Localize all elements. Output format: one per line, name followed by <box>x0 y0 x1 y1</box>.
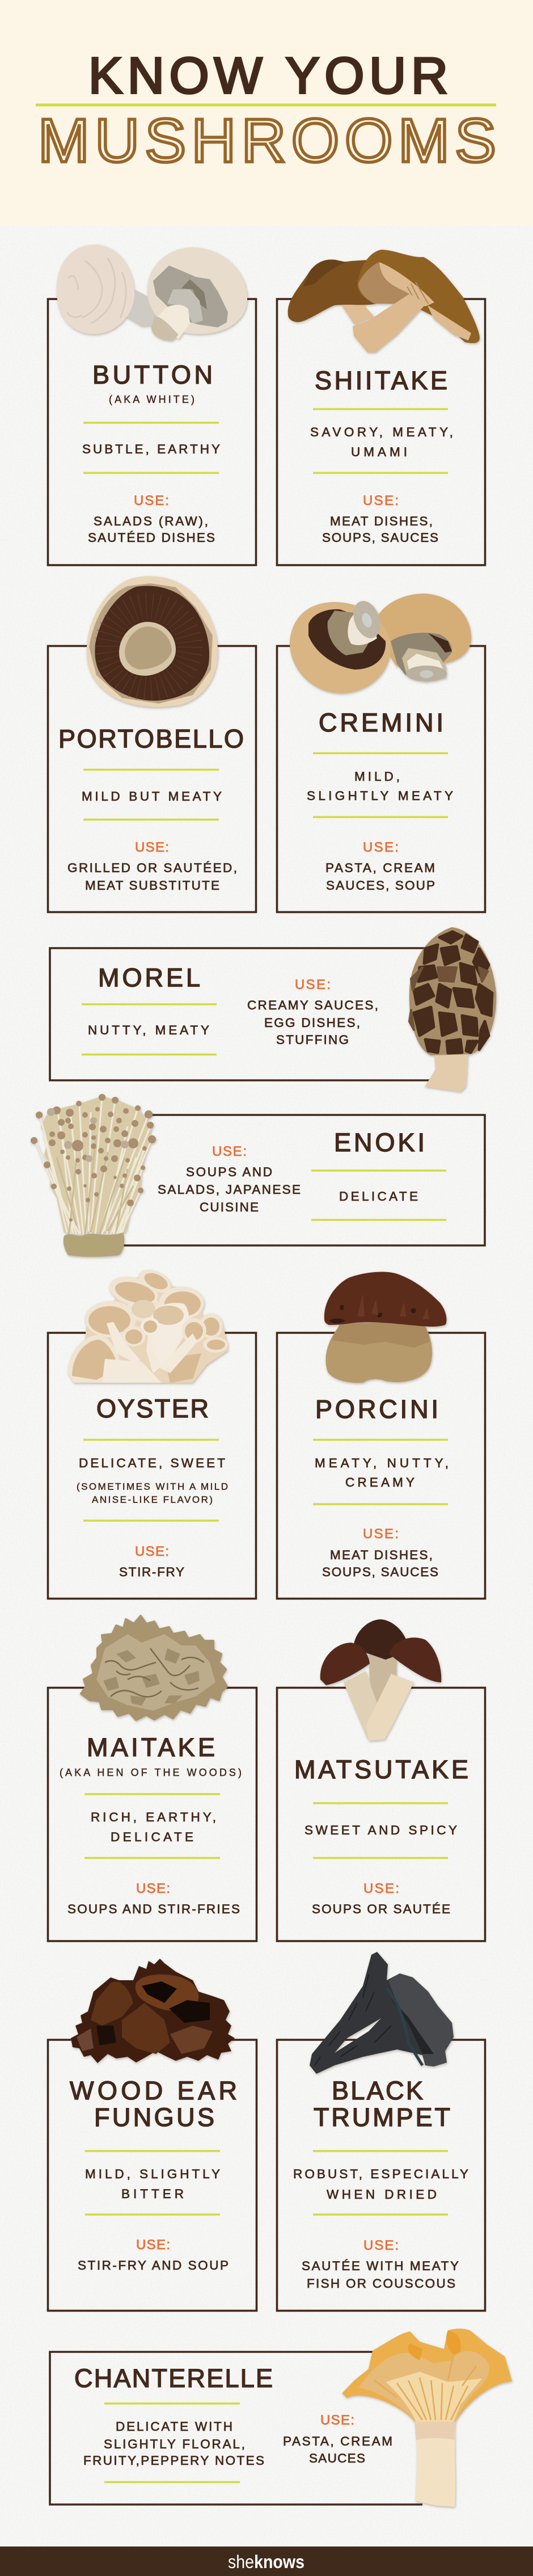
use label: USE: <box>363 2238 399 2253</box>
heading <box>70 2076 237 2132</box>
flavor text <box>91 1810 216 1844</box>
flavor text: NUTTY, MEATY <box>88 1023 209 1037</box>
panel: wood ear fungus <box>48 1959 256 2310</box>
icon: button mushrooms <box>57 245 247 340</box>
use label: USE: <box>320 2413 354 2428</box>
use label: USE: <box>135 840 169 855</box>
flavor text: WHEN DRIED <box>327 2187 437 2202</box>
heading: WOOD EAR <box>70 2076 237 2105</box>
panel: portobello <box>48 576 256 912</box>
icon: maitake mushroom <box>81 1616 227 1720</box>
flavor text: ROBUST, ESPECIALLY <box>293 2167 468 2181</box>
flavor text: DELICATE WITH <box>116 2419 232 2434</box>
heading: PORCINI <box>315 1395 438 1424</box>
use text: STUFFING <box>276 1033 349 1047</box>
icon: black trumpet mushroom <box>310 1952 454 2074</box>
flavor text: MILD, <box>354 769 400 784</box>
icon: oyster mushrooms <box>68 1265 228 1383</box>
use label: USE: <box>212 1144 247 1159</box>
flavor text <box>83 2419 264 2468</box>
use text <box>325 861 435 893</box>
panel: cremini <box>277 594 485 912</box>
flavor text: SAVORY, MEATY, <box>310 425 453 439</box>
use label: USE: <box>363 1881 399 1896</box>
flavor text: SLIGHTLY MEATY <box>307 789 453 803</box>
use text: SALADS, JAPANESE <box>158 1182 301 1197</box>
subheading: (AKA HEN OF THE WOODS) <box>60 1767 242 1778</box>
use text: GRILLED OR SAUTÉED, <box>67 861 237 875</box>
panel: button <box>48 245 256 565</box>
heading: SHIITAKE <box>315 366 447 395</box>
icon: chanterelle mushroom <box>342 2329 512 2507</box>
use text: SOUPS, SAUCES <box>322 1565 438 1579</box>
footer bar <box>0 2546 533 2576</box>
flavor text: MEATY, NUTTY, <box>315 1456 449 1470</box>
use text: CREAMY SAUCES, <box>247 998 378 1012</box>
use label: USE: <box>363 493 399 508</box>
use label: USE: <box>363 1526 399 1542</box>
flavor text <box>77 1456 228 1505</box>
flavor text: ANISE-LIKE FLAVOR) <box>92 1495 213 1505</box>
heading: PORTOBELLO <box>58 724 244 754</box>
use text <box>322 514 438 545</box>
use text <box>283 2434 392 2465</box>
heading: OYSTER <box>96 1394 209 1423</box>
use text: SOUPS, SAUCES <box>322 531 438 545</box>
panel: chanterelle <box>50 2329 512 2507</box>
icon: portobello mushroom <box>87 576 218 707</box>
use text: EGG DISHES, <box>264 1016 360 1030</box>
use text: MEAT DISHES, <box>330 514 433 528</box>
panel: enoki <box>31 1094 485 1257</box>
flavor text: DELICATE <box>339 1189 418 1203</box>
use text <box>302 2259 459 2291</box>
icon: wood ear fungus <box>71 1959 235 2063</box>
panel: matsutake <box>277 1619 485 1941</box>
heading: FUNGUS <box>94 2103 214 2132</box>
flavor text <box>310 425 453 459</box>
use label: USE: <box>363 840 399 855</box>
icon: morel mushroom <box>409 927 496 1092</box>
flavor text: SLIGHTLY FLORAL, <box>104 2437 245 2451</box>
heading: BLACK <box>332 2076 423 2105</box>
heading: MATSUTAKE <box>294 1755 468 1784</box>
use text: STIR-FRY <box>119 1565 184 1579</box>
panel: black trumpet <box>277 1952 485 2310</box>
use label: USE: <box>134 493 169 508</box>
flavor text: DELICATE <box>111 1830 193 1844</box>
flavor text: UMAMI <box>351 445 407 459</box>
flavor text: DELICATE, SWEET <box>79 1456 225 1470</box>
use text <box>322 1548 438 1579</box>
flavor text <box>293 2167 468 2202</box>
flavor text: BITTER <box>121 2187 184 2201</box>
heading: ENOKI <box>334 1128 425 1157</box>
flavor text <box>315 1456 449 1489</box>
use label: USE: <box>136 1881 170 1896</box>
heading <box>314 2076 450 2132</box>
heading: TRUMPET <box>314 2103 450 2132</box>
flavor text: SWEET AND SPICY <box>304 1823 457 1837</box>
icon: porcini mushroom <box>324 1272 447 1383</box>
use label: USE: <box>295 977 331 992</box>
use text: CUISINE <box>200 1200 259 1214</box>
use text: SOUPS OR SAUTÉE <box>312 1902 450 1916</box>
panel: oyster <box>48 1265 256 1599</box>
flavor text <box>85 2167 220 2201</box>
panel: morel <box>50 927 496 1092</box>
panel: shiitake <box>277 250 485 565</box>
use label: USE: <box>136 2237 170 2253</box>
flavor text: FRUITY,PEPPERY NOTES <box>83 2453 264 2468</box>
flavor text: MILD BUT MEATY <box>82 789 222 803</box>
use label: USE: <box>135 1544 169 1559</box>
title header: KNOW YOUR <box>88 48 448 104</box>
flavor text: CREAMY <box>345 1475 414 1489</box>
use text <box>67 861 237 893</box>
flavor text: RICH, EARTHY, <box>91 1810 216 1824</box>
flavor text: (SOMETIMES WITH A MILD <box>77 1481 228 1492</box>
heading: BUTTON <box>92 360 213 389</box>
title header: MUSHROOMS <box>38 106 496 175</box>
heading: CREMINI <box>319 708 443 737</box>
use text: SOUPS AND <box>186 1165 272 1179</box>
subheading: (AKA WHITE) <box>109 394 194 405</box>
flavor text <box>307 769 453 803</box>
icon: shiitake mushrooms <box>288 250 480 352</box>
icon: enoki mushrooms <box>31 1094 156 1257</box>
heading: CHANTERELLE <box>74 2364 273 2393</box>
use text: PASTA, CREAM <box>325 861 435 875</box>
use text: MEAT DISHES, <box>330 1548 433 1562</box>
panel: maitake <box>48 1616 256 1941</box>
flavor text: SUBTLE, EARTHY <box>82 442 220 456</box>
use text: SAUCES, SOUP <box>326 878 435 893</box>
icon: cremini mushrooms <box>290 594 471 693</box>
heading: MOREL <box>98 963 200 992</box>
use text: PASTA, CREAM <box>283 2434 392 2448</box>
use text: SAUTÉE WITH MEATY <box>302 2259 459 2273</box>
logo: sheknows: sheknows <box>228 2552 304 2572</box>
use text: FISH OR COUSCOUS <box>307 2276 455 2291</box>
use text <box>247 998 378 1047</box>
use text: SALADS (RAW), <box>94 514 208 528</box>
title header <box>0 0 533 226</box>
use text: MEAT SUBSTITUTE <box>85 878 219 893</box>
use text: SOUPS AND STIR-FRIES <box>67 1902 240 1916</box>
heading: MAITAKE <box>87 1733 215 1762</box>
use text: SAUTÉED DISHES <box>88 531 215 545</box>
panel: porcini <box>277 1272 485 1599</box>
use text: STIR-FRY AND SOUP <box>78 2258 229 2272</box>
flavor text: MILD, SLIGHTLY <box>85 2167 220 2181</box>
use text <box>158 1165 301 1214</box>
icon: matsutake mushrooms <box>320 1619 441 1741</box>
use text: SAUCES <box>309 2451 365 2465</box>
use text <box>88 514 215 545</box>
